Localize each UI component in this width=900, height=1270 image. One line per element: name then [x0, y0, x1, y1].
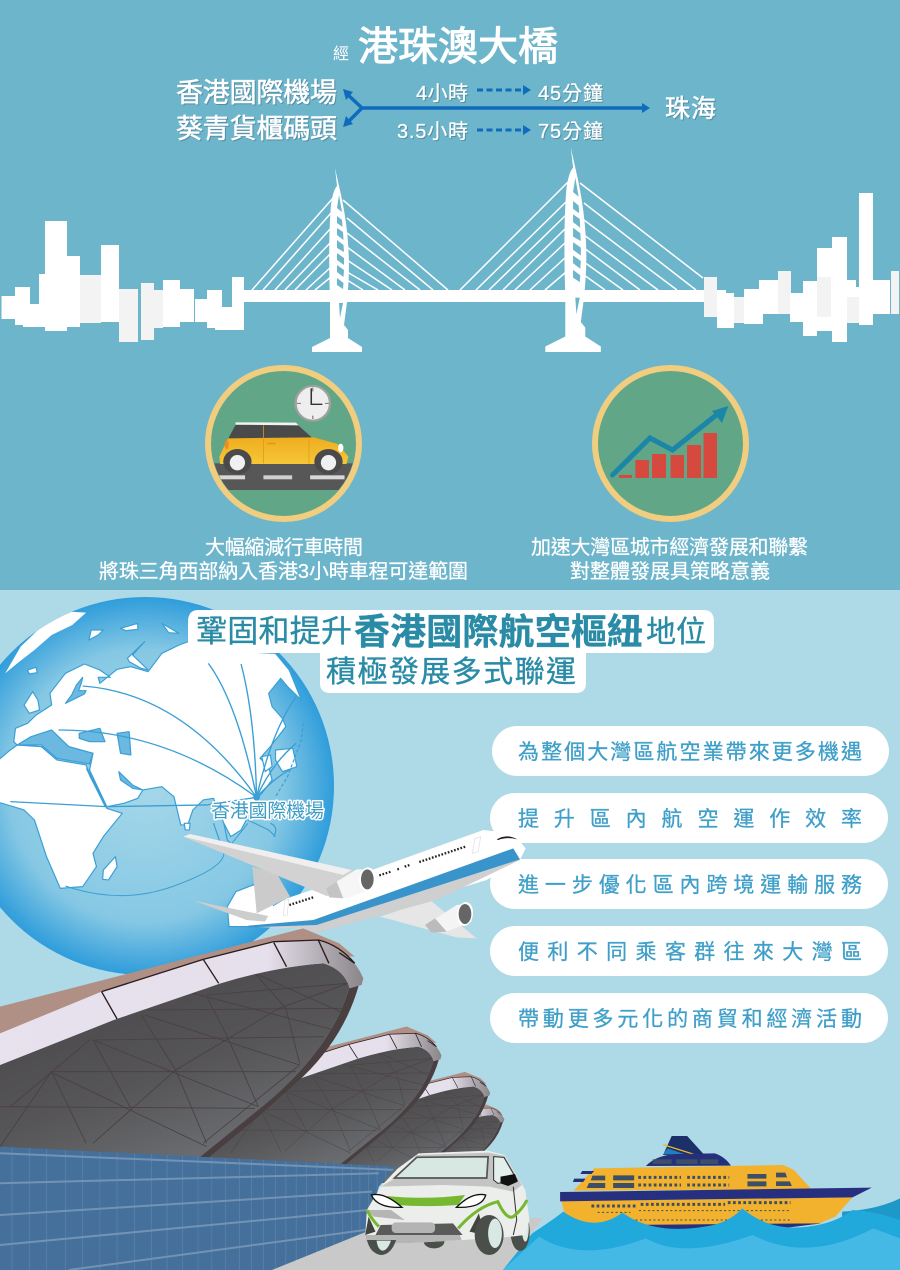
- list of benefits: [490, 726, 889, 1043]
- route diagram: [176, 78, 716, 144]
- road: [214, 463, 353, 490]
- front wave: [503, 1228, 900, 1270]
- panel: bridge section background: [0, 0, 900, 590]
- destination label: 珠海: [665, 95, 716, 123]
- heading line one: [196, 611, 706, 652]
- heading line two: 積極發展多式聯運: [326, 656, 576, 689]
- clock: [296, 386, 330, 421]
- globe sphere: [0, 597, 334, 975]
- illustration: globe with routes: [0, 597, 334, 975]
- benefit pill five: 帶動更多元化的商貿和經濟活動: [518, 1008, 862, 1031]
- front wheels: [367, 1215, 504, 1255]
- fog lamps: [365, 1213, 483, 1235]
- car body: [365, 1151, 529, 1243]
- bars: [619, 433, 717, 478]
- caption: travel time: 大幅縮減行車時間: [205, 536, 363, 559]
- benefit pill two: [490, 793, 888, 843]
- skyline: left: [2, 221, 244, 342]
- icon: growth chart: [595, 368, 746, 519]
- near engine: [326, 866, 377, 898]
- hub label: 香港國際機場: [211, 800, 324, 822]
- travel times: 75分鐘: [538, 120, 603, 143]
- travel times: [397, 82, 603, 143]
- benefit pill one: 為整個大灣區航空業帶來更多機遇: [518, 741, 862, 764]
- illustration: bridge and skyline: [2, 148, 899, 352]
- far engine: [425, 901, 475, 933]
- heading line one: 鞏固和提升: [196, 614, 352, 649]
- near wing: [183, 834, 373, 896]
- illustration: sea waves and ferry: [503, 1136, 900, 1270]
- bridge tower: left: [312, 168, 362, 352]
- glass wall: [0, 1147, 396, 1270]
- heading line one: 地位: [646, 616, 706, 649]
- flight routes: [10, 663, 296, 807]
- stay cables: [252, 182, 703, 290]
- icon background circle: [595, 368, 746, 519]
- road surface: [272, 1218, 543, 1270]
- fuselage stripe: [248, 848, 520, 927]
- fuselage underside: [250, 852, 520, 933]
- benefit pill three: 進一步優化區內跨境運輸服務: [518, 874, 862, 897]
- small title prefix: 經: [333, 45, 349, 63]
- illustration: electric car: [365, 1151, 530, 1255]
- title: via the bridge: [333, 25, 558, 69]
- doors: [283, 837, 481, 916]
- bridge tower: right: [545, 148, 601, 352]
- icon: car and clock: [203, 368, 364, 519]
- heading line one: 香港國際航空樞紐: [354, 611, 643, 652]
- benefit pill four: [490, 926, 888, 976]
- origin labels: 香港國際機場: [176, 78, 337, 108]
- benefit pill two: 提升區內航空運作效率: [518, 808, 862, 831]
- travel times: 3.5小時: [397, 120, 468, 143]
- benefit pill three: [490, 859, 888, 909]
- cockpit: [497, 836, 517, 840]
- green livery: [387, 1195, 465, 1206]
- terminal roof: third: [222, 1072, 490, 1182]
- heading halo: [188, 610, 714, 693]
- headlights: [371, 1194, 486, 1207]
- windows: [289, 847, 465, 905]
- origin labels: [176, 78, 337, 144]
- benefit pill four: 便利不同乘客群往來大灣區: [518, 941, 862, 964]
- door line: [513, 1187, 517, 1235]
- caption: economic development: 加速大灣區城市經濟發展和聯繫: [531, 536, 808, 559]
- car: [219, 422, 348, 474]
- trend arrow: [612, 406, 728, 475]
- side window: [494, 1157, 517, 1183]
- caption: economic development: [531, 536, 808, 583]
- travel times: 45分鐘: [538, 82, 603, 105]
- benefit pill one: [492, 726, 889, 776]
- icon background circle: [208, 368, 359, 519]
- fuselage: [248, 830, 526, 932]
- terminal roof: fourth: [313, 1104, 504, 1183]
- tail fin: [252, 867, 290, 913]
- caption: travel time: 將珠三角西部納入香港3小時車程可達範圍: [99, 560, 468, 583]
- caption: economic development: 對整體發展具策略意義: [570, 560, 770, 583]
- origin labels: 葵青貨櫃碼頭: [176, 114, 337, 144]
- benefit pill five: [490, 993, 888, 1043]
- caption: travel time: [99, 536, 468, 583]
- skyline: right: [704, 193, 899, 342]
- panel: airport section background: [0, 590, 900, 1270]
- continents: [0, 612, 303, 927]
- car roof and shading: [381, 1153, 522, 1192]
- travel times: 4小時: [416, 82, 468, 105]
- terminal roof: second: [71, 1026, 441, 1179]
- far wing: [380, 900, 477, 938]
- bridge deck: [244, 290, 704, 302]
- rear wheels: [424, 1212, 530, 1251]
- illustration: airport terminal: [0, 928, 504, 1270]
- windshield: [394, 1157, 488, 1178]
- middle wave: [503, 1208, 900, 1270]
- grille and plate: [375, 1223, 463, 1235]
- heading: airport hub: [188, 610, 714, 693]
- terminal roof: first: [0, 928, 363, 1191]
- far wave: [842, 1198, 900, 1227]
- ferry: [560, 1136, 872, 1230]
- route arrows: [343, 85, 650, 135]
- main title: 港珠澳大橋: [358, 25, 558, 69]
- illustration: airplane: [183, 830, 526, 938]
- tailplane: [193, 901, 268, 922]
